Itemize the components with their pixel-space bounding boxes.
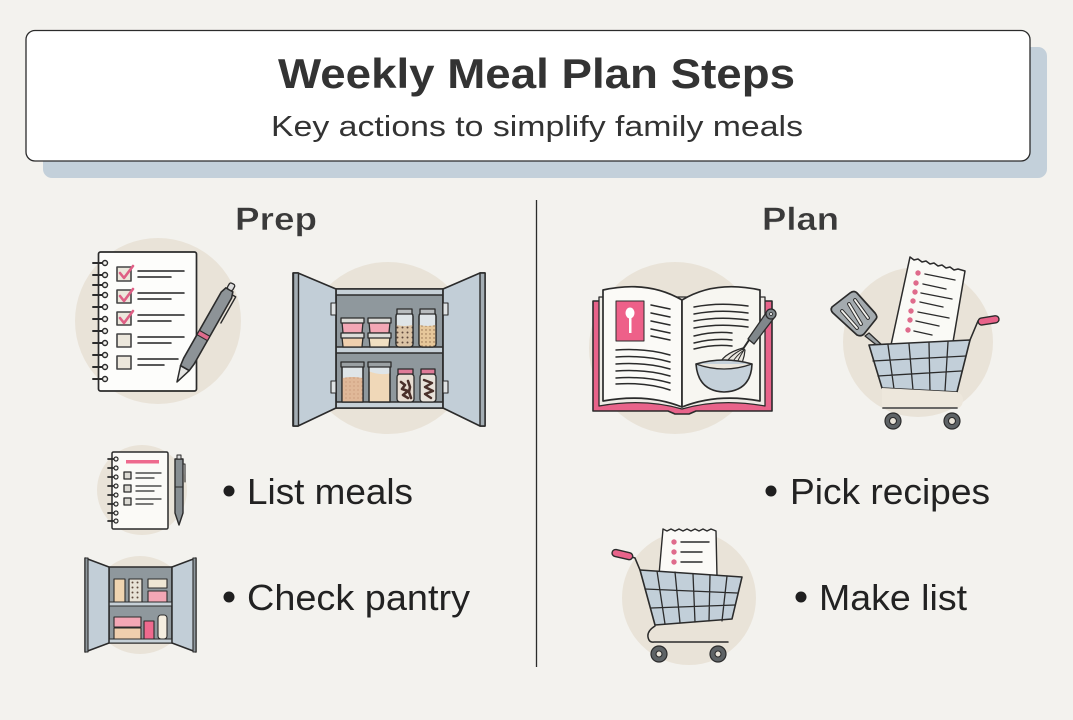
basket bbox=[869, 340, 970, 392]
title: Weekly Meal Plan Steps bbox=[278, 50, 795, 97]
bowl bbox=[696, 360, 752, 392]
column divider bbox=[536, 200, 538, 667]
spatula bbox=[865, 333, 883, 347]
tray bbox=[882, 388, 963, 409]
header banner bbox=[26, 30, 1047, 178]
bullet: Check pantry: Check pantry bbox=[247, 577, 470, 618]
top shelf containers bbox=[341, 309, 436, 347]
icon: small notebook and pen bbox=[97, 445, 187, 535]
pages bbox=[603, 287, 682, 407]
bottom shelf containers bbox=[341, 362, 436, 402]
icon: small cart with receipt bbox=[611, 529, 756, 665]
handle and grip bbox=[632, 557, 640, 570]
recipe image bbox=[616, 301, 644, 341]
pen bbox=[172, 281, 241, 386]
tray bbox=[648, 626, 728, 642]
icon: open recipe book with whisk and bowl bbox=[589, 262, 776, 434]
basket bbox=[640, 570, 742, 625]
wheels bbox=[651, 646, 667, 662]
heading: Plan: Plan bbox=[762, 201, 839, 237]
bullet: List meals: List meals bbox=[247, 471, 413, 512]
heading: Prep: Prep bbox=[235, 201, 317, 237]
checkboxes bbox=[117, 267, 131, 369]
wheels bbox=[885, 413, 901, 429]
icon: pantry cabinet bbox=[293, 262, 485, 434]
whisk bbox=[718, 348, 745, 369]
icon: shopping cart with receipt and spatula bbox=[831, 257, 999, 429]
handle bbox=[970, 321, 978, 340]
small pen bbox=[175, 459, 183, 525]
icon: small pantry cabinet bbox=[85, 556, 196, 654]
subtitle: Key actions to simplify family meals bbox=[271, 111, 803, 143]
receipt bbox=[891, 257, 965, 345]
book cover bbox=[593, 301, 772, 414]
doors bbox=[293, 273, 336, 426]
icon: checklist with pen bbox=[75, 238, 241, 404]
spiral binding bbox=[93, 260, 108, 382]
bullet: Pick recipes: Pick recipes bbox=[790, 471, 990, 512]
text lines bbox=[616, 304, 748, 390]
bullet: Make list: Make list bbox=[819, 577, 967, 618]
